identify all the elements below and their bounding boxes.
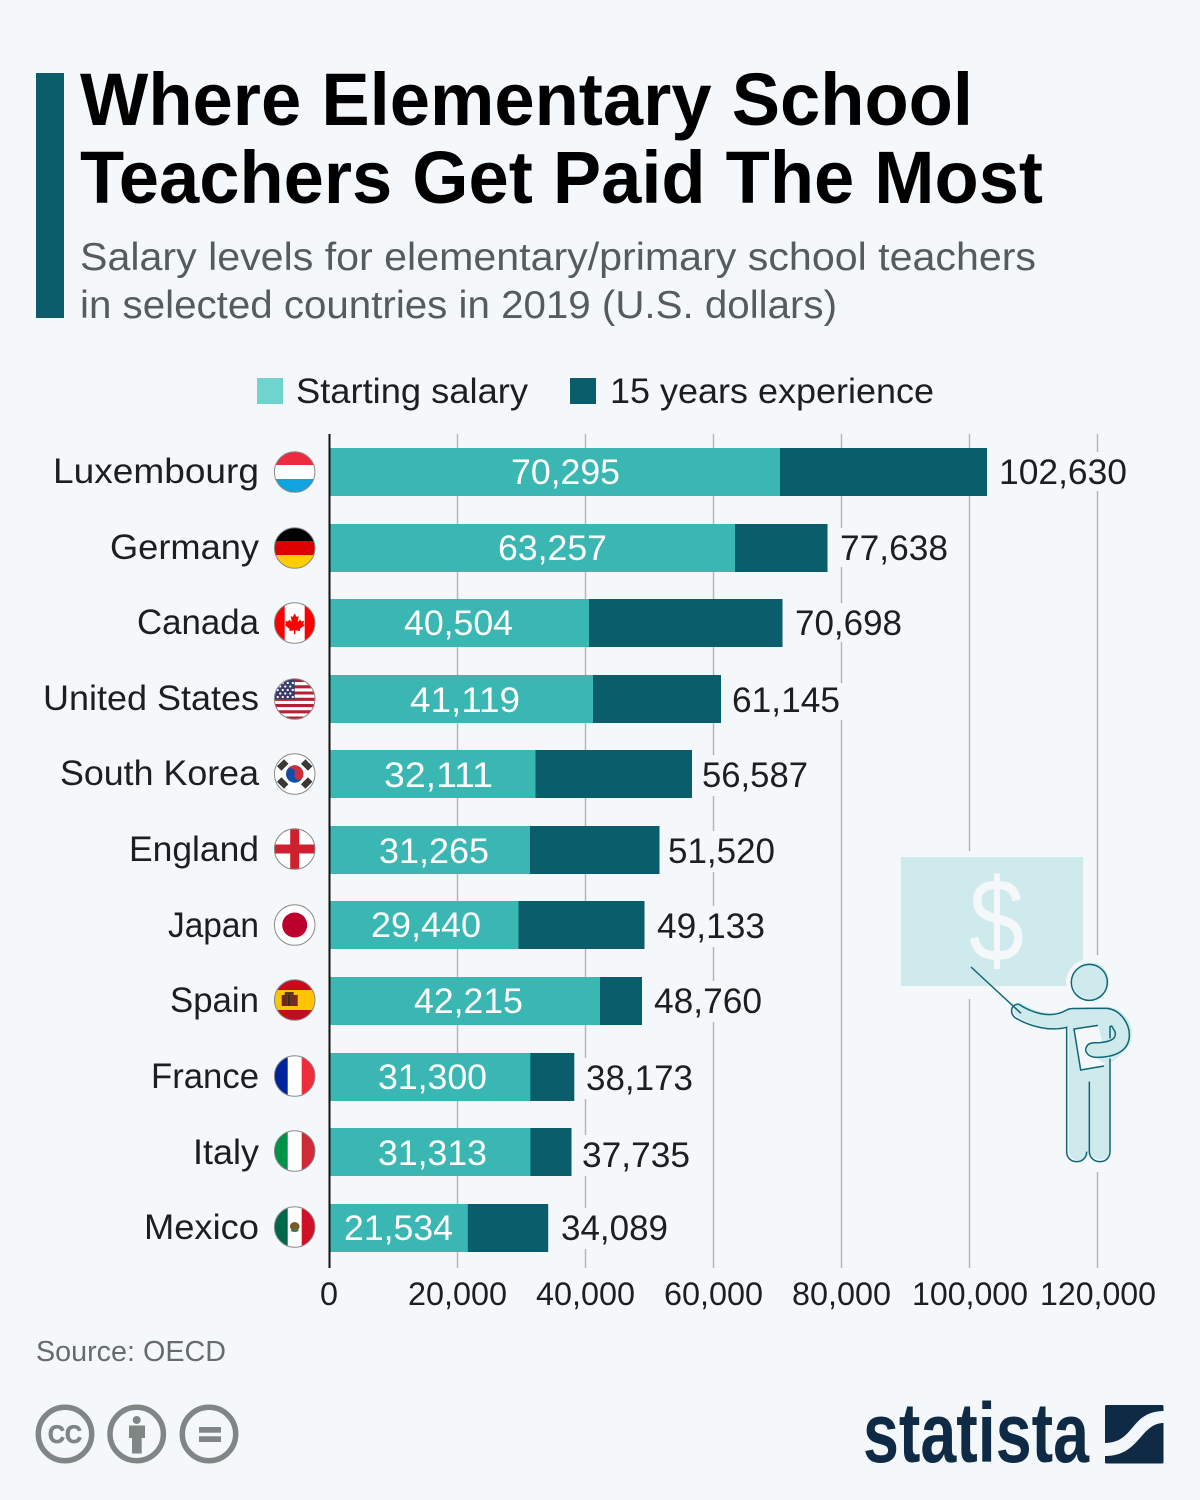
x axis labels: 0 bbox=[320, 1276, 338, 1312]
row: Canada: Canada bbox=[137, 603, 260, 642]
row: United States: 41,119 bbox=[410, 681, 520, 720]
title: Where Elementary School bbox=[80, 58, 973, 141]
source: Source: OECD bbox=[36, 1336, 226, 1368]
row: England: 51,520 bbox=[668, 832, 775, 871]
row: Spain: 42,215 bbox=[414, 982, 523, 1021]
row: England: England bbox=[129, 830, 259, 869]
row: France: 31,300 bbox=[378, 1058, 487, 1097]
row: Japan: 49,133 bbox=[657, 907, 765, 946]
subtitle: Salary levels for elementary/primary school teachers bbox=[80, 236, 1036, 279]
row: Mexico: Mexico bbox=[144, 1208, 259, 1247]
title bbox=[80, 58, 1043, 219]
x axis labels: 100,000 bbox=[912, 1276, 1028, 1312]
row: United States: 61,145 bbox=[732, 681, 840, 720]
illustration: teacher pointing at dollar board bbox=[901, 855, 1132, 1162]
row: Spain: Spain bbox=[170, 981, 259, 1020]
legend: 15 years experience bbox=[610, 372, 934, 411]
row: Japan: 29,440 bbox=[371, 906, 481, 945]
row: Canada: 40,504 bbox=[404, 604, 513, 643]
row: Mexico: 21,534 bbox=[344, 1209, 453, 1248]
bar chart bbox=[43, 448, 1133, 1252]
legend bbox=[257, 372, 934, 411]
legend: Starting salary bbox=[296, 372, 529, 411]
icon: no derivatives bbox=[182, 1407, 236, 1461]
flag: United States bbox=[274, 678, 316, 720]
x axis labels: 80,000 bbox=[792, 1276, 891, 1312]
row: Germany: Germany bbox=[110, 528, 260, 567]
x axis labels: 40,000 bbox=[536, 1276, 635, 1312]
row: Spain bbox=[170, 977, 768, 1025]
row: Luxembourg: 102,630 bbox=[999, 453, 1127, 492]
flag: Luxembourg bbox=[274, 451, 316, 493]
row: France: 38,173 bbox=[586, 1059, 693, 1098]
row: United States: United States bbox=[43, 679, 259, 718]
row: South Korea: South Korea bbox=[60, 754, 260, 793]
row: Japan bbox=[168, 901, 771, 949]
row: Mexico bbox=[144, 1204, 674, 1252]
subtitle bbox=[80, 236, 1036, 327]
row: England: 31,265 bbox=[379, 832, 489, 871]
teacher figure bbox=[971, 959, 1132, 1162]
row: Italy: 37,735 bbox=[582, 1136, 690, 1175]
row: Luxembourg bbox=[53, 448, 1133, 496]
row: Spain: 48,760 bbox=[654, 982, 762, 1021]
row: France bbox=[151, 1053, 699, 1101]
subtitle: in selected countries in 2019 (U.S. dollars) bbox=[80, 284, 837, 327]
flag: France bbox=[274, 1055, 316, 1097]
row: South Korea: 32,111 bbox=[384, 756, 493, 795]
row: Canada bbox=[137, 599, 908, 647]
row: Italy bbox=[193, 1128, 696, 1176]
flag: Italy bbox=[274, 1130, 316, 1172]
dollar sign: $ bbox=[969, 855, 1024, 987]
row: United States bbox=[43, 675, 846, 723]
row: Luxembourg: Luxembourg bbox=[53, 452, 259, 491]
row: Germany bbox=[110, 524, 954, 572]
x axis labels: 120,000 bbox=[1040, 1276, 1156, 1312]
row: Germany: 63,257 bbox=[498, 529, 607, 568]
row: Mexico: 34,089 bbox=[561, 1209, 668, 1248]
flag: Japan bbox=[274, 905, 315, 945]
x axis labels: 20,000 bbox=[408, 1276, 507, 1312]
flag: Spain bbox=[274, 979, 316, 1021]
icon: creative commons bbox=[38, 1407, 92, 1461]
row: England bbox=[129, 826, 781, 874]
title accent bar bbox=[36, 73, 64, 318]
board bbox=[901, 857, 1083, 986]
row: Germany: 77,638 bbox=[840, 529, 948, 568]
flag: Canada bbox=[274, 602, 316, 644]
title: Teachers Get Paid The Most bbox=[80, 136, 1043, 219]
row: Luxembourg: 70,295 bbox=[511, 453, 620, 492]
row: Italy: Italy bbox=[193, 1133, 259, 1172]
x axis labels bbox=[320, 1276, 1156, 1312]
logo: statista: statista bbox=[863, 1386, 1090, 1480]
row: Italy: 31,313 bbox=[378, 1134, 487, 1173]
row: South Korea bbox=[60, 750, 814, 798]
x axis labels: 60,000 bbox=[664, 1276, 763, 1312]
row: France: France bbox=[151, 1057, 259, 1096]
row: Japan: Japan bbox=[168, 906, 259, 945]
row: South Korea: 56,587 bbox=[702, 756, 808, 795]
row: Canada: 70,698 bbox=[795, 604, 902, 643]
icon: attribution bbox=[110, 1407, 163, 1461]
flag: Germany bbox=[274, 527, 316, 569]
icon: creative commons: CC bbox=[48, 1421, 82, 1449]
flag: England bbox=[274, 828, 316, 870]
flag: South Korea bbox=[274, 753, 316, 795]
flag: Mexico bbox=[274, 1206, 316, 1248]
